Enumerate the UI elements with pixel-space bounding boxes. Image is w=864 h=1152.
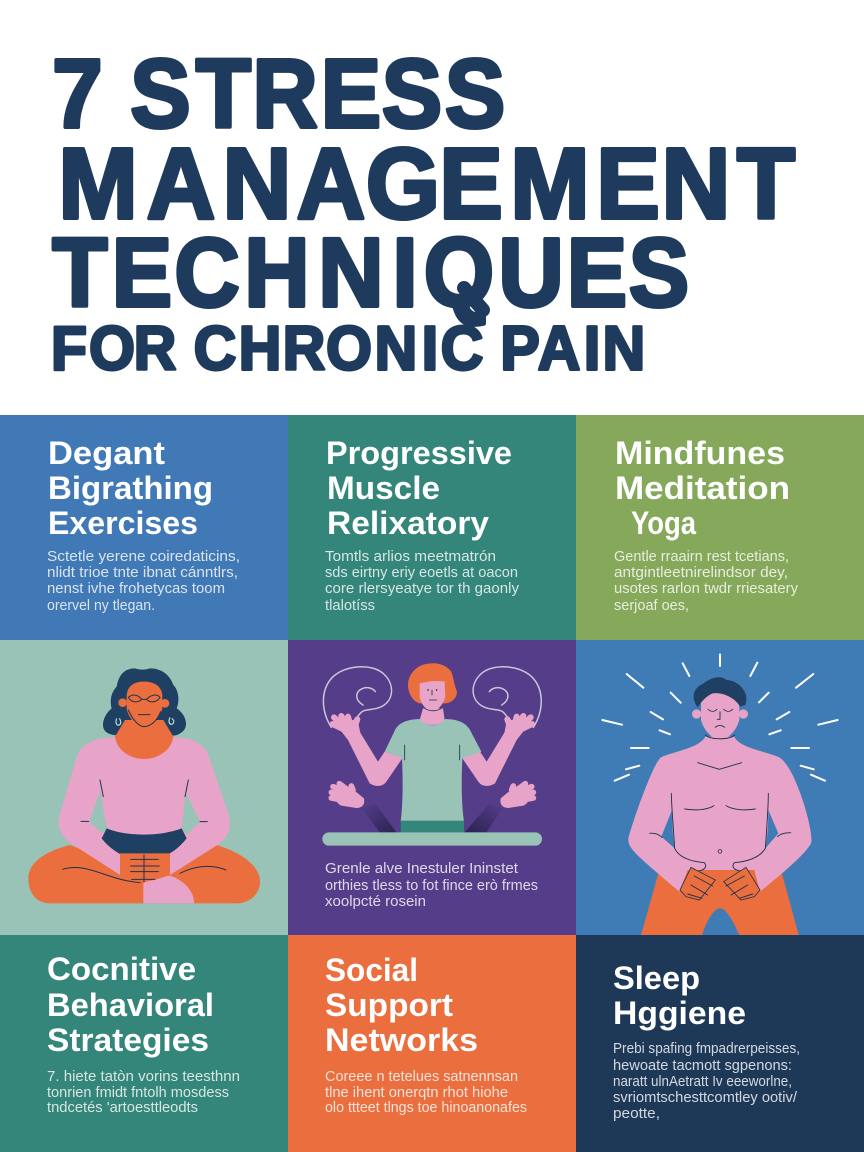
text block: muscle description: tlalotíss — [325, 597, 375, 614]
panel: social support networks — [288, 935, 576, 1152]
text block: sleep description: naratt ulnAetratt Iv eeeworlne, — [613, 1073, 792, 1090]
heading: breathing exercises: Exercises — [48, 505, 198, 541]
heading: cognitive behavioral: Behavioral — [47, 987, 214, 1023]
text block: muscle description: sds eirtny eriy eoetls at oacon — [325, 564, 518, 581]
icon: radiating lines — [602, 654, 838, 781]
heading: mindfulness: Yoga — [631, 505, 696, 541]
panel: progressive muscle relaxation — [288, 415, 576, 640]
title: 7 STRESS — [52, 39, 505, 148]
heading: cognitive behavioral: Cocnitive — [47, 951, 196, 987]
text block: breathing description: nlidt trioe tnte ibnat cánntlrs, — [47, 564, 238, 581]
heading: progressive muscle — [326, 435, 512, 541]
heading: social support: Support — [325, 987, 453, 1023]
title — [51, 39, 795, 383]
text block: mindfulness description: antgintleetnirelindsor dey, — [614, 564, 788, 581]
panel: man with radiating tension — [576, 640, 864, 935]
heading: cognitive behavioral — [47, 951, 214, 1058]
panel: mindfulness meditation yoga — [576, 415, 864, 640]
title: TECHNIQUES — [52, 218, 689, 327]
heading: progressive muscle: Relixatory — [327, 505, 489, 541]
heading: progressive muscle: Progressive — [326, 435, 512, 471]
panel: meditating woman — [0, 640, 288, 935]
text block: cognitive description: tonrien fmidt fntolh mosdess — [47, 1084, 229, 1101]
heading: cognitive behavioral: Strategies — [47, 1022, 209, 1058]
text block: purple description: orthies tless to fot fince erò frmes — [325, 877, 538, 894]
text block: breathing description: nenst ivhe frohetycas toom — [47, 580, 225, 597]
heading: breathing exercises: Degant — [48, 435, 165, 471]
heading: mindfulness — [615, 435, 790, 541]
text block: sleep description: hewoate tacmott sgpenons: — [613, 1057, 792, 1074]
text block: social description: olo ttteet tlngs toe hinoanonafes — [325, 1099, 527, 1116]
text block: sleep description: svriomtschesttcomtley ootiv/ — [613, 1089, 798, 1106]
text block: sleep description — [613, 1040, 800, 1122]
text block: breathing description: Sctetle yerene coiredaticins, — [47, 548, 240, 565]
text block: cognitive description: tndcetés 'artoesttleodts — [47, 1099, 198, 1116]
text block: mindfulness description: Gentle rraairn rest tcetians, — [614, 548, 789, 565]
heading: progressive muscle: Muscle — [327, 470, 440, 506]
panel: breathing exercises — [0, 415, 288, 640]
text block: social description: Coreee n tetelues satnennsan — [325, 1068, 518, 1085]
panel: cognitive behavioral strategies — [0, 935, 288, 1152]
heading: sleep hygiene — [613, 960, 746, 1031]
icon: left hand and arm — [331, 716, 403, 808]
text block: social description: tlne ihent onerqtn rhot hiohe — [325, 1084, 508, 1101]
icon: shirtless man with fists — [628, 677, 811, 935]
heading: sleep hygiene: Hggiene — [613, 995, 746, 1031]
text block: breathing description — [47, 548, 240, 614]
text block: purple description — [325, 860, 538, 910]
text block: mindfulness description: usotes rarlon twdr rriesatery — [614, 580, 798, 597]
text block: mindfulness description — [614, 548, 798, 614]
title: FOR CHRONIC PAIN — [51, 313, 645, 383]
text block: cognitive description — [47, 1068, 240, 1116]
icon: woman seated cross-legged — [28, 668, 260, 903]
heading: sleep hygiene: Sleep — [613, 960, 700, 996]
text block: muscle description — [325, 548, 519, 614]
heading: breathing exercises: Bigrathing — [48, 470, 213, 506]
text block: mindfulness description: serjoaf oes, — [614, 597, 689, 614]
icon: person with raised hands and spirals — [322, 663, 542, 846]
heading: mindfulness: Meditation — [615, 470, 790, 506]
icon: right hand and arm — [462, 716, 533, 808]
text block: purple description: xoolpcté rosein — [325, 893, 426, 910]
text block: sleep description: peotte, — [613, 1105, 660, 1122]
text block: muscle description: core rlersyeatye tor th gaonly — [325, 580, 519, 597]
heading: social support — [325, 952, 478, 1058]
text block: muscle description: Tomtls arlios meetmatrón — [325, 548, 496, 565]
text block: social description — [325, 1068, 527, 1116]
heading: mindfulness: Mindfunes — [615, 435, 785, 471]
text block: purple description: Grenle alve Inestuler Ininstet — [325, 860, 519, 877]
heading: social support: Networks — [325, 1022, 478, 1058]
text block: cognitive description: 7. hiete tatòn vorins teesthnn — [47, 1068, 240, 1085]
heading: social support: Social — [325, 952, 418, 988]
text block: breathing description: orervel ny tlegan. — [47, 597, 155, 614]
panel: sleep hygiene — [576, 935, 864, 1152]
text block: sleep description: Prebi spafing fmpadrerpeisses, — [613, 1040, 800, 1057]
heading: breathing exercises — [48, 435, 213, 541]
panel: purple technique — [288, 640, 576, 935]
title: MANAGEMENT — [58, 128, 795, 240]
